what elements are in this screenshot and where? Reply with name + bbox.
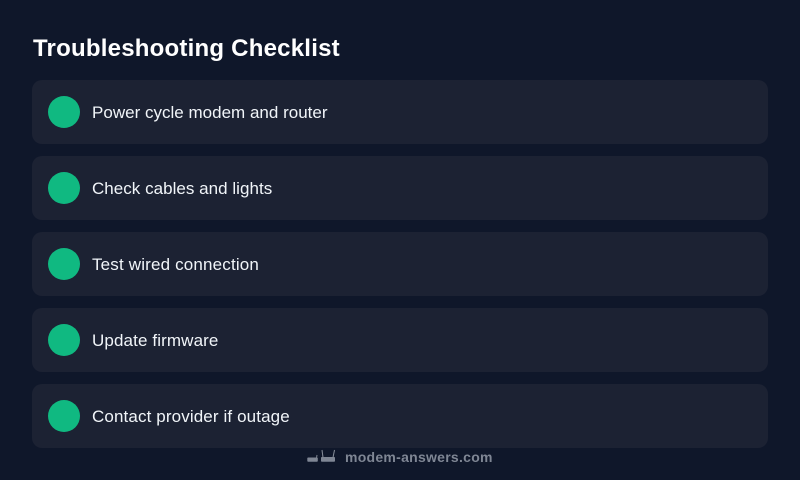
text: item 4: Update firmware bbox=[92, 331, 219, 350]
icon: status dot 1 bbox=[48, 96, 80, 128]
panel: checklist item 5 bbox=[32, 384, 768, 448]
panel: checklist item 1 bbox=[32, 80, 768, 144]
text: item 1: Power cycle modem and router bbox=[92, 103, 328, 122]
panel: checklist item 4 bbox=[32, 308, 768, 372]
title: Troubleshooting Checklist bbox=[33, 35, 340, 62]
text: item 5: Contact provider if outage bbox=[92, 407, 290, 426]
footer: site name: modem-answers.com bbox=[345, 449, 493, 465]
panel: checklist item 3 bbox=[32, 232, 768, 296]
panel: checklist item 2 bbox=[32, 156, 768, 220]
icon: status dot 4 bbox=[48, 324, 80, 356]
icon: modem and router logo bbox=[307, 450, 335, 462]
text: item 3: Test wired connection bbox=[92, 255, 259, 274]
icon: status dot 2 bbox=[48, 172, 80, 204]
icon: status dot 3 bbox=[48, 248, 80, 280]
text: item 2: Check cables and lights bbox=[92, 179, 272, 198]
icon: status dot 5 bbox=[48, 400, 80, 432]
